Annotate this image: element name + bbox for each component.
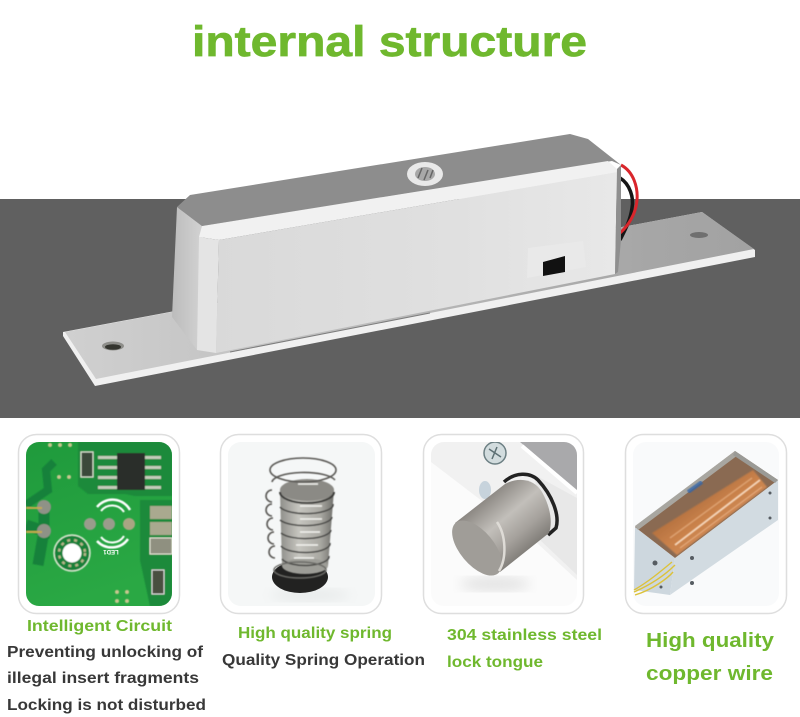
caption: copper wire: copper wire <box>646 662 773 685</box>
caption: copper wire <box>646 629 775 685</box>
description: circuit: illegal insert fragments <box>7 670 199 687</box>
lock body bevel <box>199 161 617 240</box>
base plate <box>63 212 755 386</box>
resistors <box>150 506 172 519</box>
lock body top face <box>177 134 621 226</box>
panel frame <box>220 434 382 614</box>
panel frame <box>18 434 180 614</box>
panel: lock tongue <box>424 434 584 614</box>
lock body front face <box>216 172 617 353</box>
led <box>97 500 130 547</box>
tongue photo <box>431 442 577 606</box>
panel: intelligent circuit <box>18 434 180 614</box>
panel: spring <box>220 434 382 614</box>
chip <box>117 453 145 490</box>
circuit board photo <box>26 442 172 606</box>
description: circuit: Locking is not disturbed <box>7 697 206 714</box>
switch window <box>527 241 586 278</box>
description: circuit: Preventing unlocking of <box>7 644 204 661</box>
panel frame <box>626 434 786 614</box>
panel frame <box>424 434 584 614</box>
red and black wires <box>620 165 637 240</box>
lock body left bevel <box>197 237 219 353</box>
background band <box>0 199 800 418</box>
description: circuit <box>7 644 206 714</box>
caption: lock tongue: 304 stainless steel <box>447 627 602 644</box>
panel: copper wire <box>626 434 786 614</box>
title: internal structure <box>192 18 587 66</box>
caption: copper wire: High quality <box>646 629 775 652</box>
lock body left face <box>172 207 202 350</box>
circuit board photo: LED1 <box>103 548 119 554</box>
caption: lock tongue <box>447 627 602 671</box>
product: electric bolt lock <box>63 134 755 386</box>
caption: spring: High quality spring <box>238 625 392 642</box>
spring photo <box>228 442 375 606</box>
right side sliver <box>615 165 621 274</box>
copper coil photo <box>634 451 778 596</box>
shadow line <box>230 313 430 352</box>
caption: intelligent circuit: Intelligent Circuit <box>27 618 172 635</box>
description: spring: Quality Spring Operation <box>222 652 425 669</box>
caption: lock tongue: lock tongue <box>447 654 543 671</box>
sticker <box>407 162 443 186</box>
